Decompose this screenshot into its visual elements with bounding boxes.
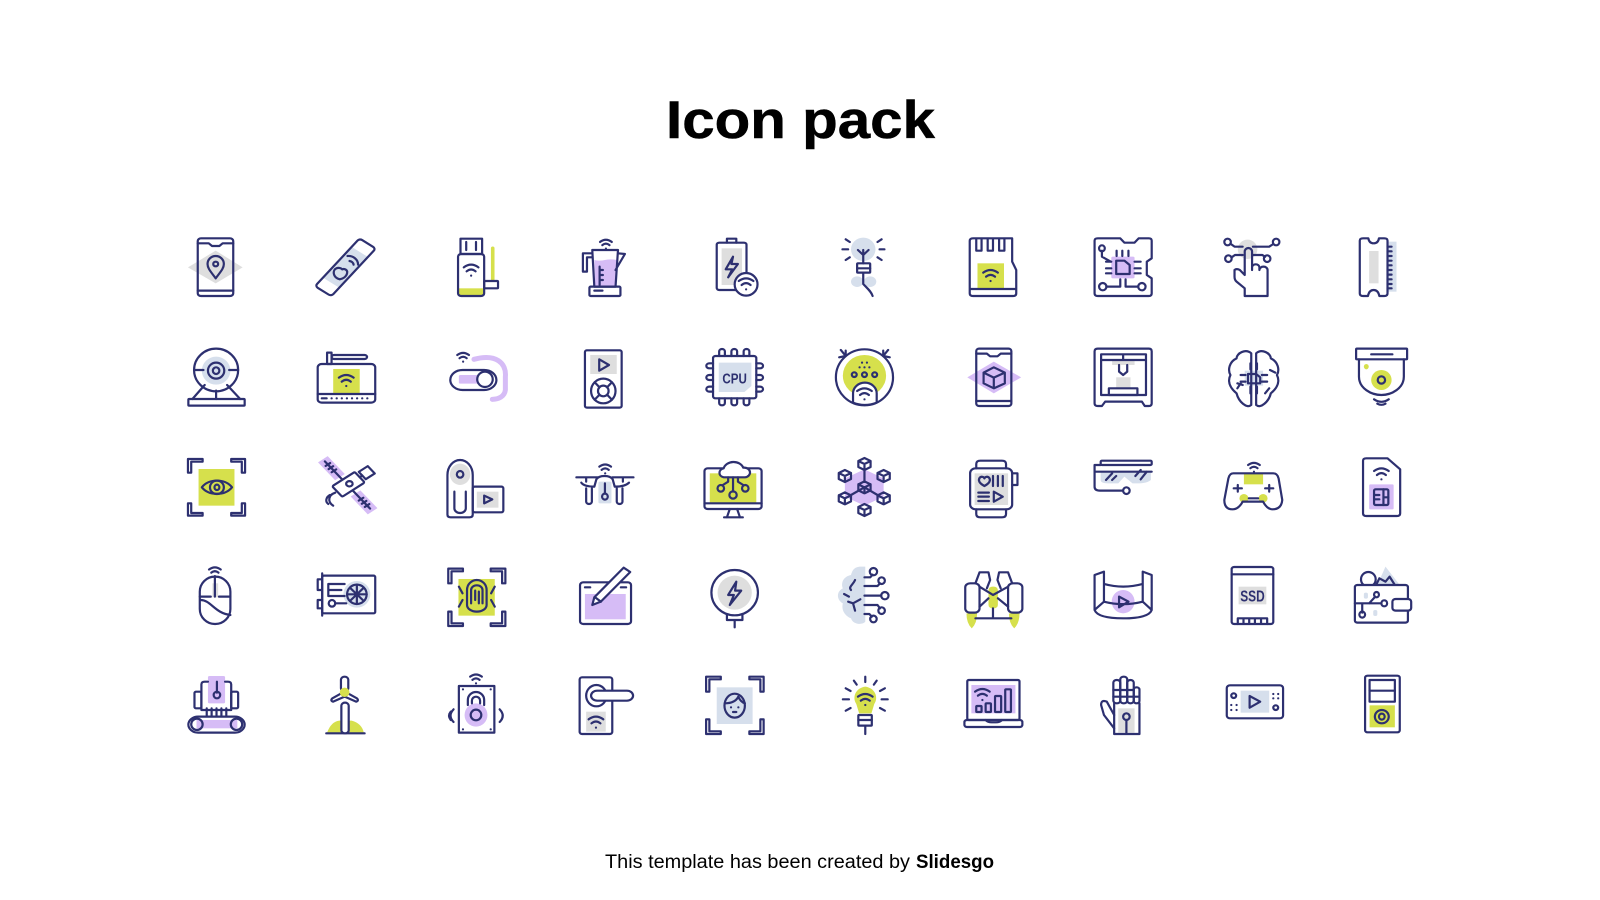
icon: usb wifi dongle	[458, 239, 498, 296]
icon: cpu chip	[706, 349, 763, 405]
icon: cpu chip: CPU	[722, 371, 747, 387]
icon: jetpack	[965, 572, 1022, 628]
icon: smart speaker lock	[449, 675, 503, 733]
icon: vr glasses	[1095, 461, 1152, 494]
icon: drawing tablet	[580, 568, 631, 624]
icon: robot vacuum	[836, 349, 893, 405]
icon: smart plant bulb	[842, 238, 884, 296]
icon: smart light bulb	[843, 677, 888, 734]
row 1 and 2, right half	[836, 238, 1407, 406]
icon: game controller	[1224, 463, 1282, 509]
icon: webcam	[188, 349, 245, 406]
icon: wireless mouse	[200, 567, 230, 624]
footer credit: Slidesgo	[916, 852, 994, 873]
icon: camcorder	[447, 460, 503, 517]
icon: smart door handle	[580, 677, 633, 734]
row 1 and 2, left half	[188, 238, 763, 408]
icon: digital wallet	[1355, 567, 1411, 623]
icon: smart band	[315, 238, 376, 296]
row 5, left half	[188, 675, 764, 734]
icon: handheld console	[1227, 685, 1283, 718]
icon: phone with location pin	[188, 238, 243, 296]
icon: eye scan	[188, 459, 245, 516]
icon: smart switch	[450, 353, 505, 399]
icon: curved screen	[1095, 572, 1152, 618]
icon: brain chip	[1229, 351, 1278, 406]
icon: wind turbine	[326, 677, 365, 733]
icon: satellite	[313, 444, 396, 518]
row 5, right half	[843, 676, 1400, 734]
icon: smart blender	[583, 240, 625, 296]
icon: touch circuit	[1224, 239, 1279, 296]
icon: sd card	[970, 238, 1016, 296]
icon: phone with cube	[967, 349, 1021, 406]
title: Icon pack	[666, 91, 936, 150]
icon: wireless charger	[711, 570, 758, 627]
icon: face scan	[706, 677, 764, 734]
icon: ai half brain	[838, 567, 889, 624]
icon: music player	[585, 350, 622, 408]
row 3 and 4, left half	[188, 444, 762, 627]
icon: sim card	[1363, 458, 1400, 516]
icon: robot conveyor	[188, 676, 245, 733]
icon: smart watch	[970, 461, 1017, 517]
icon: fingerprint scan	[448, 569, 505, 626]
icon: ram stick	[1360, 238, 1396, 296]
row 3 and 4, right half	[838, 458, 1411, 628]
icon: smart glove	[1101, 677, 1139, 734]
icon: 3d printer	[1095, 349, 1152, 406]
icon: circuit board	[1095, 238, 1152, 296]
footer credit: This template has been created by	[605, 852, 911, 873]
icon: smart battery	[717, 239, 758, 296]
icon: blockchain cubes	[839, 458, 890, 516]
icon: laptop stats	[964, 680, 1022, 727]
icon: security camera	[1356, 349, 1407, 405]
icon: wifi router	[318, 353, 375, 403]
icon: drone	[576, 465, 633, 504]
icon: ssd drive	[1232, 567, 1273, 624]
icon: graphics card	[318, 573, 375, 616]
icon: cloud monitor	[704, 462, 762, 517]
icon: pc tower	[1365, 676, 1400, 732]
icon: ssd drive: SSD	[1240, 587, 1265, 605]
